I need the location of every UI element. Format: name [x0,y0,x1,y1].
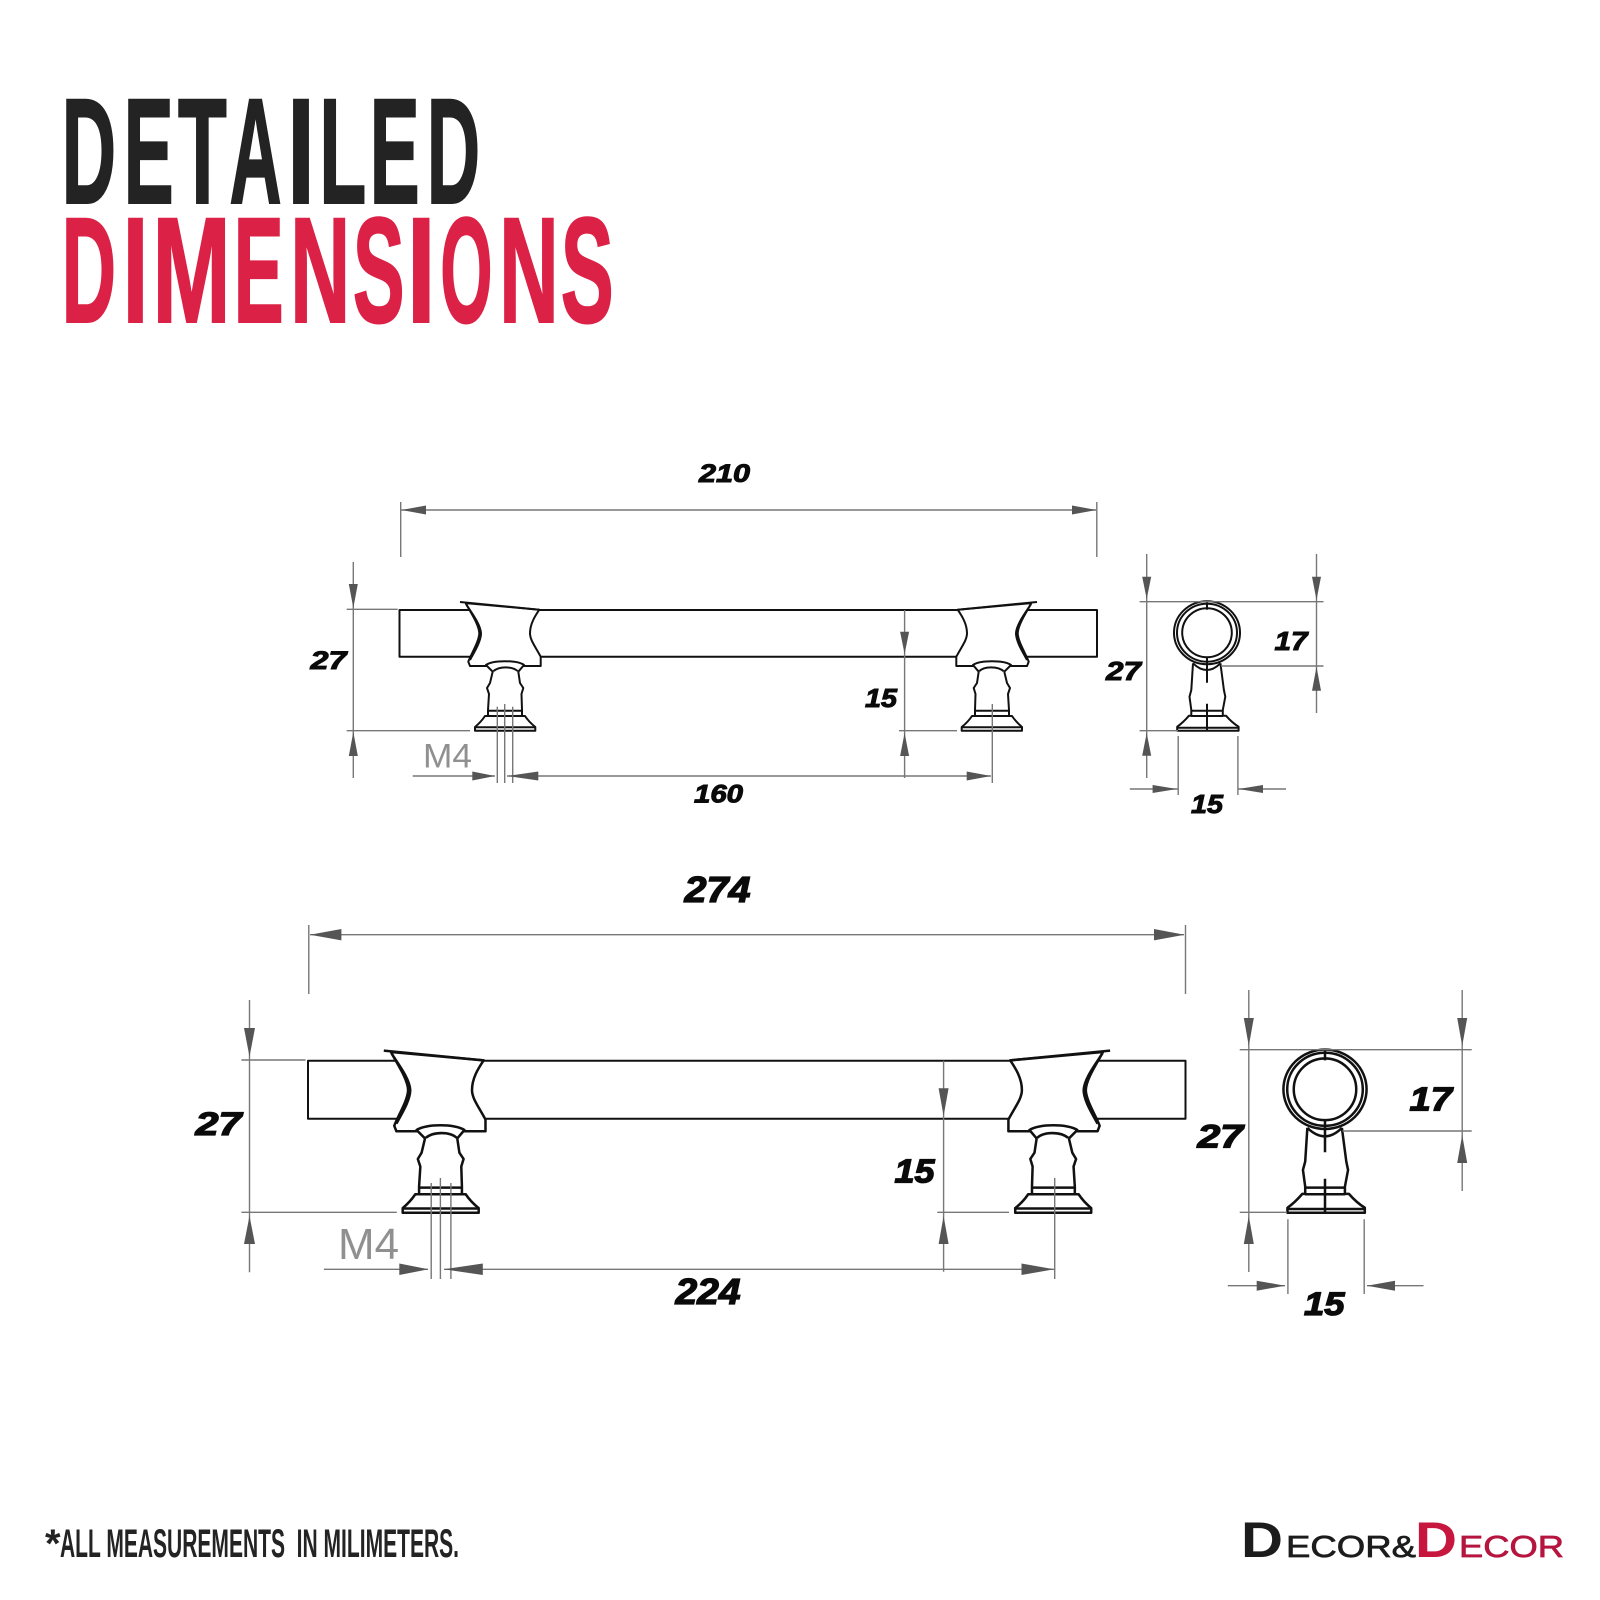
dimension: height 27 [309,562,470,778]
logo: Decor&Decor: D [1415,1512,1457,1568]
dimension: clearance 15 [894,1061,1009,1272]
title [62,67,614,354]
dimension: height 27: 27 [194,1106,244,1142]
dimension: ring diameter 17 [1342,990,1472,1191]
title line: DIMENSIONS: E [234,186,284,354]
dimension: hole spacing 224 [444,1178,1055,1312]
dimension: clearance 15: 15 [894,1153,935,1190]
handle side view [1283,1049,1367,1213]
dimension: base width 15 [1130,736,1286,819]
title: D [427,67,480,235]
dimension: base width 15: 15 [1191,789,1224,819]
dimension: side height 27: 27 [1105,656,1143,686]
dimension: thread M4: M4 [423,738,472,776]
handle front view [400,602,1097,731]
title line: DETAILED: A [230,67,282,235]
title line: DETAILED: T [178,67,227,235]
dimension: thread M4 [413,704,513,783]
title line: DIMENSIONS: I [407,186,436,354]
title line: DIMENSIONS: N [499,186,559,354]
dimension: clearance 15: 15 [865,683,898,713]
footnote: ALL MEASUREMENTS IN MILIMETERS. [60,1522,459,1566]
dimension: side height 27: 27 [1196,1118,1246,1154]
dimension: thread M4 [324,1178,451,1279]
dimension: clearance 15 [865,610,957,778]
logo: Decor&Decor: ECOR& [1286,1529,1416,1564]
handle side view [1174,601,1240,731]
dimension: overall length 210 [401,460,1097,557]
title line: DETAILED: E [370,67,420,235]
logo: Decor&Decor [1241,1512,1564,1568]
dimension: ring diameter 17 [1221,554,1324,713]
dimension: hole spacing 224: 224 [674,1271,740,1312]
footnote: * [45,1522,61,1566]
logo: Decor&Decor: D [1241,1512,1283,1568]
title line: DIMENSIONS: O [440,186,492,354]
logo: Decor&Decor: ECOR [1459,1529,1564,1564]
title line: DIMENSIONS: M [152,186,231,354]
title line: DIMENSIONS: S [353,186,405,354]
title line: DETAILED: I [287,67,315,235]
panel: 160 mm handle drawing [309,460,1324,819]
dimension: height 27 [194,1000,397,1272]
handle front view [308,1051,1186,1213]
title line: DETAILED: D [62,67,116,235]
title line: DIMENSIONS: I [122,186,148,354]
dimension: ring diameter 17: 17 [1410,1081,1454,1118]
dimension: thread M4: M4 [338,1220,399,1269]
panel: 224 mm handle drawing [194,869,1472,1322]
dimension: overall length 274 [309,869,1186,994]
dimension: ring diameter 17: 17 [1274,626,1309,656]
dimension: overall length 274: 274 [683,869,750,910]
dimension: hole spacing 160: 160 [694,781,743,809]
title line: DETAILED: E [124,67,174,235]
dimension: overall length 210: 210 [698,460,750,488]
title line: DIMENSIONS: S [561,186,614,354]
dimension: hole spacing 160 [507,704,992,809]
dimension: base width 15: 15 [1304,1286,1346,1322]
dimension: side height 27 [1105,554,1324,778]
title line: DETAILED: L [319,67,366,235]
dimension: height 27: 27 [309,647,348,675]
title line: DIMENSIONS: N [290,186,350,354]
dimension: base width 15 [1228,1219,1424,1322]
title line: DIMENSIONS: D [62,186,116,354]
dimension: side height 27 [1196,990,1472,1272]
